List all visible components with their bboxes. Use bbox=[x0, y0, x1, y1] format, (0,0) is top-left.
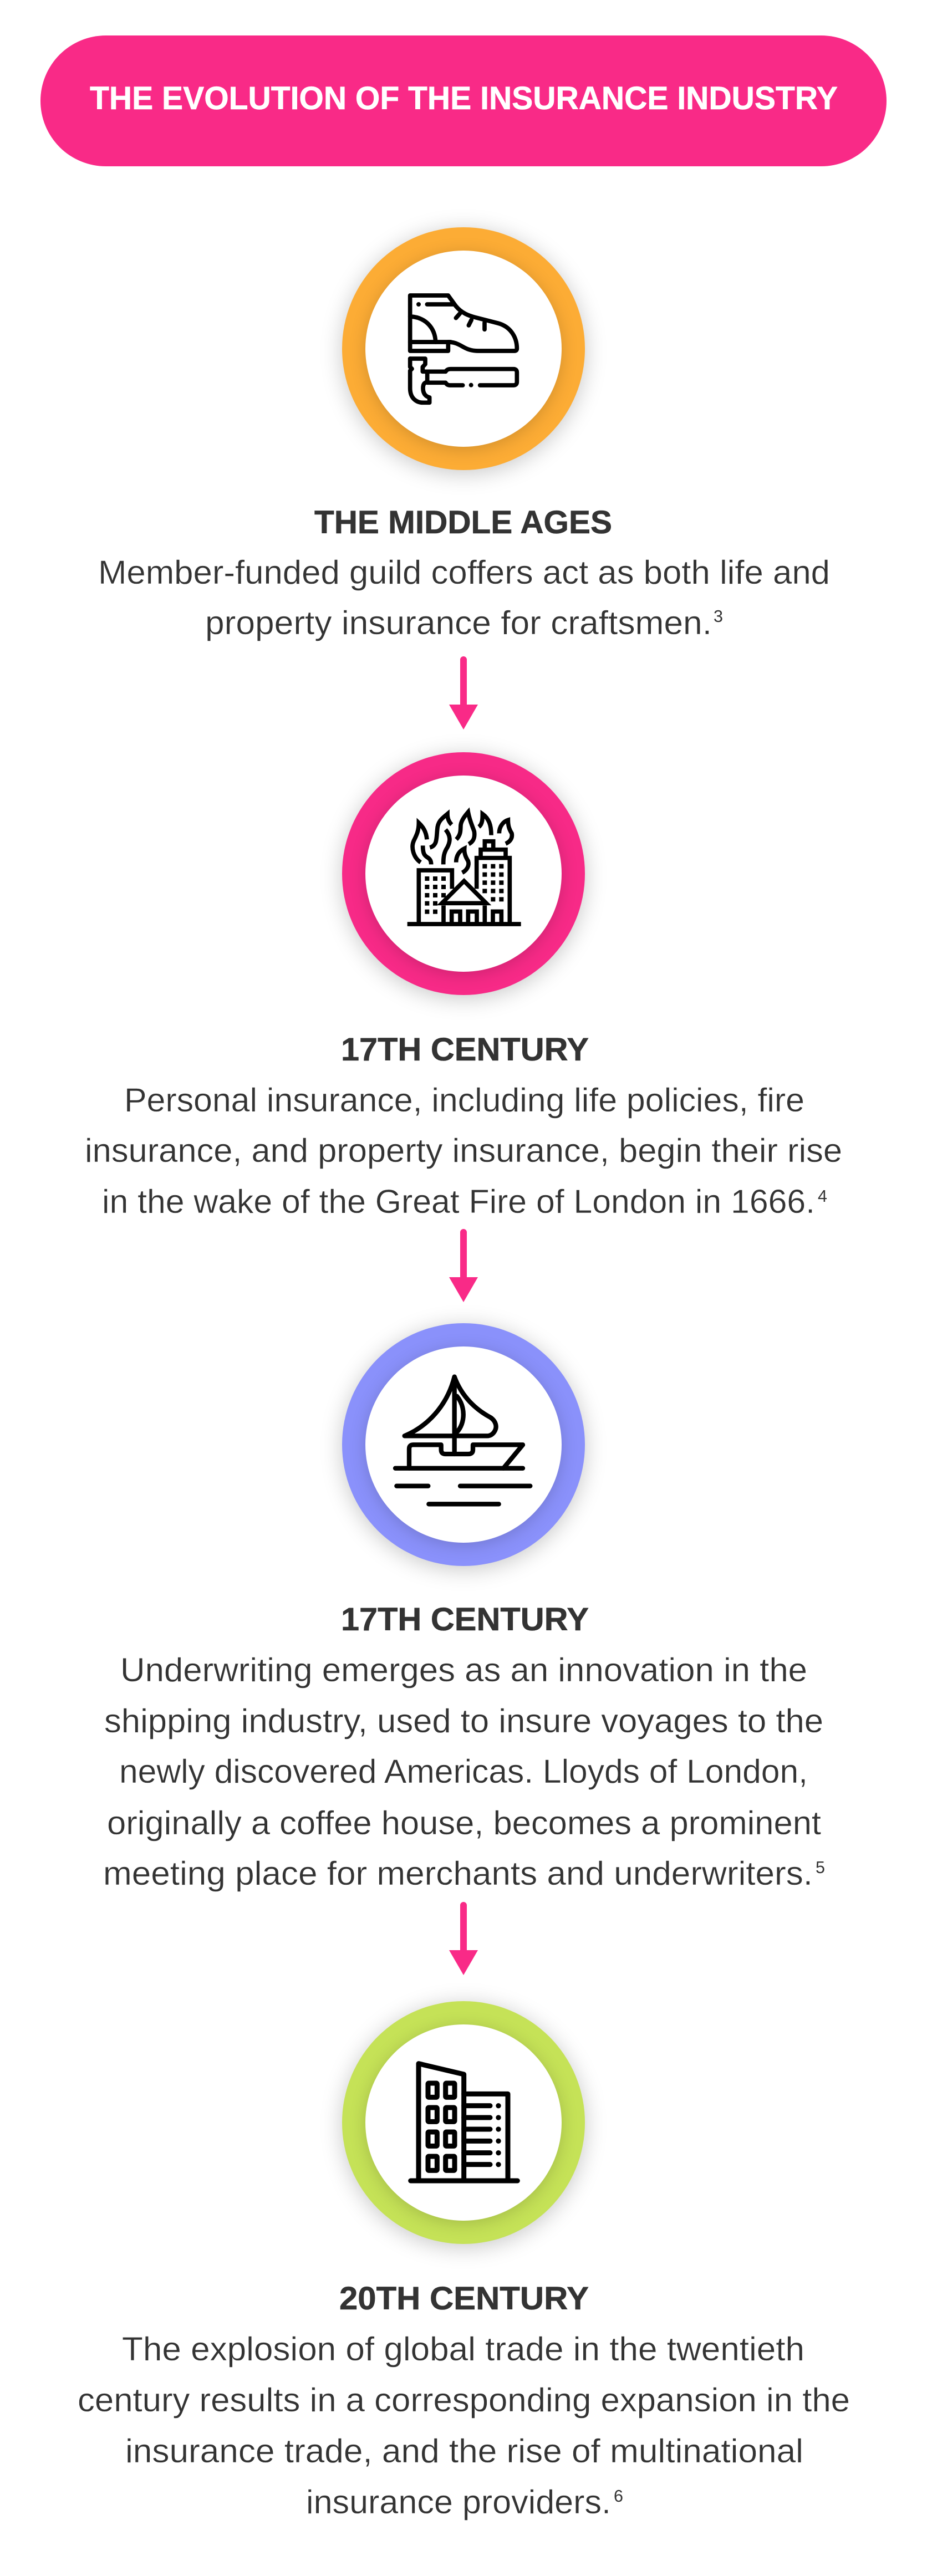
text block: meeting place for merchants and underwriters. bbox=[103, 1855, 813, 1892]
text block: Underwriting emerges as an innovation in the bbox=[120, 1651, 807, 1689]
text block: newly discovered Americas. Lloyds of London, bbox=[119, 1753, 808, 1790]
text block: insurance, and property insurance, begin their rise bbox=[85, 1132, 842, 1169]
title: THE EVOLUTION OF THE INSURANCE INDUSTRY bbox=[90, 80, 838, 116]
text block bbox=[85, 1082, 842, 1220]
text block bbox=[103, 1651, 825, 1892]
text block: property insurance for craftsmen. bbox=[205, 604, 712, 641]
arrow bbox=[449, 656, 478, 730]
panel: 17th century, fire bbox=[85, 745, 842, 1220]
panel: 20th century bbox=[78, 1995, 850, 2521]
icon: boot and hammer bbox=[408, 293, 519, 405]
text block: shipping industry, used to insure voyages to the bbox=[104, 1702, 823, 1740]
heading: THE MIDDLE AGES bbox=[314, 504, 612, 540]
arrow bbox=[449, 1902, 478, 1975]
panel: the middle ages bbox=[98, 221, 830, 641]
icon: burning city bbox=[407, 807, 521, 926]
badge: green ring bbox=[342, 2001, 585, 2244]
text block: insurance providers. bbox=[306, 2483, 611, 2521]
text block: 6 bbox=[614, 2486, 623, 2506]
text block: Member-funded guild coffers act as both life and bbox=[98, 554, 830, 591]
heading: 17TH CENTURY bbox=[341, 1601, 589, 1638]
text block: 4 bbox=[818, 1186, 827, 1206]
icon: sailing ship bbox=[393, 1375, 532, 1507]
text block bbox=[98, 554, 830, 641]
text block bbox=[78, 2330, 850, 2521]
title banner bbox=[40, 35, 887, 166]
text block: 3 bbox=[714, 606, 723, 626]
badge: pink ring bbox=[342, 752, 585, 995]
text block: The explosion of global trade in the twentieth bbox=[122, 2330, 804, 2368]
arrow bbox=[449, 1229, 478, 1302]
text block: in the wake of the Great Fire of London in 1666. bbox=[102, 1183, 815, 1220]
heading: 20TH CENTURY bbox=[339, 2281, 589, 2317]
text block: originally a coffee house, becomes a prominent bbox=[107, 1804, 821, 1842]
text block: insurance trade, and the rise of multinational bbox=[125, 2432, 803, 2470]
badge: orange ring bbox=[342, 227, 585, 470]
text block: 5 bbox=[816, 1858, 825, 1877]
text block: Personal insurance, including life policies, fire bbox=[124, 1082, 804, 1119]
badge: periwinkle ring bbox=[342, 1323, 585, 1566]
panel: 17th century, shipping bbox=[103, 1316, 825, 1892]
heading: 17TH CENTURY bbox=[341, 1032, 589, 1068]
text block: century results in a corresponding expansion in the bbox=[78, 2381, 850, 2419]
icon: office buildings bbox=[408, 2061, 520, 2183]
